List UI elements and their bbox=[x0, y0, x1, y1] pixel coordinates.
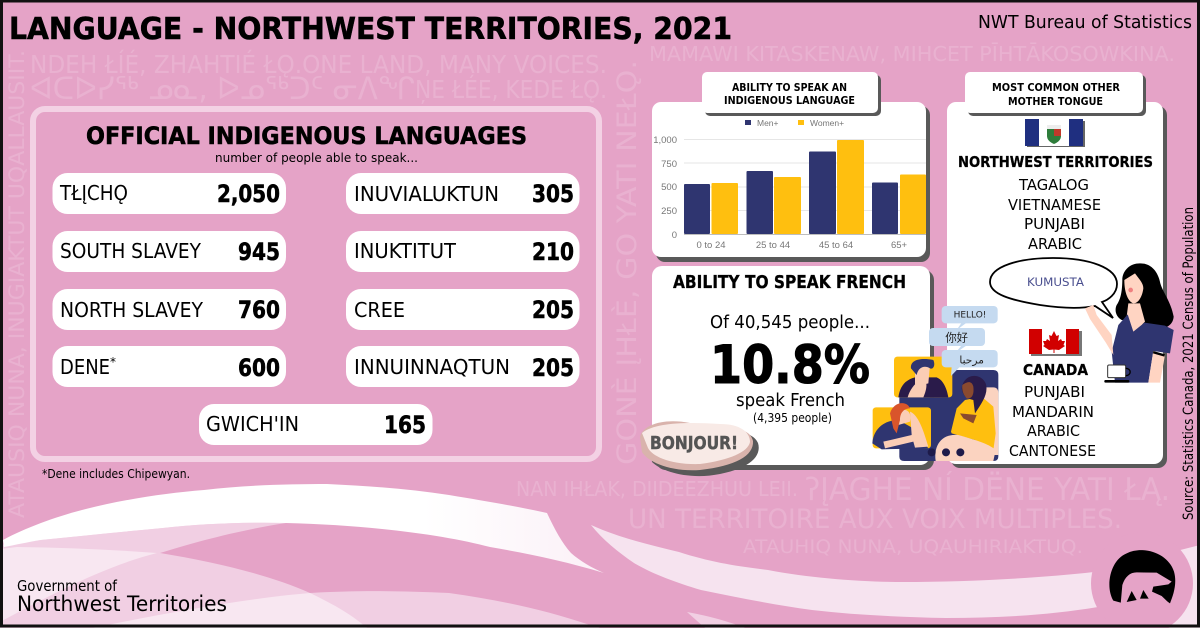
greeting bubbles: 你好 bbox=[945, 329, 968, 345]
panel: French: ABILITY TO SPEAK FRENCH bbox=[673, 272, 906, 293]
background swooshes bbox=[0, 484, 1200, 628]
pill: Inuvialuktun: INUVIALUKTUN bbox=[354, 182, 499, 206]
list: Canada: ARABIC bbox=[1027, 422, 1080, 440]
faded multilingual background text: NAN IHŁAK, DIIDEEZHUU LEII. bbox=[516, 477, 798, 501]
panel: French: speak French bbox=[736, 390, 845, 411]
panel: French: Of 40,545 people... bbox=[710, 312, 870, 333]
pill: Innuinnaqtun: INNUINNAQTUN bbox=[354, 355, 510, 379]
list: Northwest Territories: VIETNAMESE bbox=[1008, 196, 1101, 214]
faded multilingual background text: MAMAWI KITASKENAW, MIHCET PĪHTĀKOSOWKINA. bbox=[649, 42, 1175, 66]
faded multilingual background text: ʔĮAGHE NÍ DËNE YATI ŁĄ. bbox=[805, 472, 1170, 508]
pill: Dene: 600 bbox=[238, 354, 280, 382]
faded multilingual background text: UN TERRITOIRE AUX VOIX MULTIPLES. bbox=[628, 504, 1122, 535]
greeting bubbles: HELLO! bbox=[954, 311, 986, 321]
mother tongue title tab: MOTHER TONGUE bbox=[1008, 96, 1103, 108]
list: Northwest Territories: NORTHWEST TERRITORIES bbox=[958, 153, 1153, 171]
pill: Innuinnaqtun: 205 bbox=[532, 354, 574, 382]
greeting bubbles: مرحبا bbox=[959, 353, 984, 366]
illustration: woman with mug bbox=[1085, 263, 1174, 383]
pill: Inuktitut: INUKTITUT bbox=[354, 239, 457, 263]
bar chart: 0 to 24 bbox=[696, 240, 726, 251]
list: Northwest Territories: TAGALOG bbox=[1018, 176, 1089, 194]
badge: Bonjour bbox=[640, 421, 759, 476]
pill: Innuinnaqtun bbox=[346, 346, 580, 387]
speech bubble: Kumusta: KUMUSTA bbox=[1027, 275, 1084, 289]
list: Canada: MANDARIN bbox=[1012, 403, 1094, 421]
bar chart: 750 bbox=[661, 159, 677, 170]
chart legend bbox=[745, 118, 844, 128]
pill: North Slavey: 760 bbox=[238, 296, 280, 324]
list: Northwest Territories bbox=[958, 153, 1153, 253]
pill: North Slavey bbox=[52, 289, 286, 330]
pill: Tlicho bbox=[52, 173, 286, 214]
bar chart bbox=[653, 135, 926, 251]
pill: South Slavey: SOUTH SLAVEY bbox=[60, 239, 202, 263]
icon: polar bear logo bbox=[1091, 532, 1193, 628]
panel: most common other mother tongue bbox=[947, 102, 1167, 468]
list: Canada: PUNJABI bbox=[1024, 383, 1085, 401]
source note: Source: Statistics Canada, 2021 Census of Population bbox=[1181, 207, 1197, 520]
list: Northwest Territories: PUNJABI bbox=[1024, 215, 1085, 233]
icon: NWT flag bbox=[1025, 119, 1085, 147]
publisher name: NWT Bureau of Statistics bbox=[978, 12, 1192, 33]
pill: Gwich'in bbox=[199, 404, 432, 445]
government logo text bbox=[17, 577, 227, 616]
bar chart: 1,000 bbox=[653, 135, 677, 146]
pill: South Slavey bbox=[52, 231, 286, 272]
pill: Gwich'in: 165 bbox=[384, 411, 426, 439]
government logo text: Northwest Territories bbox=[17, 592, 227, 616]
panel: chart bbox=[652, 102, 930, 262]
pill: Cree: CREE bbox=[354, 298, 405, 322]
badge: Bonjour: BONJOUR! bbox=[650, 433, 738, 454]
pill: Cree bbox=[346, 289, 580, 330]
bar chart: 500 bbox=[661, 182, 677, 193]
pill: Inuvialuktun: 305 bbox=[532, 180, 574, 208]
greeting bubbles bbox=[929, 306, 998, 376]
chart title tab: INDIGENOUS LANGUAGE bbox=[724, 95, 855, 107]
bar chart: 25 to 44 bbox=[756, 240, 790, 251]
pill: Tlicho: 2,050 bbox=[217, 180, 280, 208]
big percentage: 10.8% bbox=[710, 335, 870, 396]
mother tongue title tab: MOST COMMON OTHER bbox=[992, 82, 1120, 94]
pill: Dene: * bbox=[110, 355, 116, 369]
mother tongue title tab bbox=[965, 72, 1146, 116]
footnote: *Dene includes Chipewyan. bbox=[42, 467, 190, 481]
chart legend: Men+ bbox=[757, 118, 779, 128]
pill: Inuktitut bbox=[346, 231, 580, 272]
pill: Gwich'in: GWICH'IN bbox=[206, 412, 299, 436]
pill: North Slavey: NORTH SLAVEY bbox=[60, 298, 204, 322]
faded multilingual background text: ATAUSIQ NUNA, INUGIAKTUT UQALLAUSIIT. bbox=[5, 50, 29, 518]
pill: Dene bbox=[52, 346, 286, 387]
icon: Canadian flag bbox=[1029, 329, 1082, 356]
list: Canada bbox=[1009, 361, 1096, 460]
panel: French: (4,395 people) bbox=[753, 411, 832, 425]
faded multilingual background text: GONÈ ĮHŁÈ, GO YATI NEŁǪ. bbox=[611, 60, 643, 465]
panel heading: OFFICIAL INDIGENOUS LANGUAGES bbox=[86, 122, 527, 150]
list: Canada: CANADA bbox=[1023, 361, 1088, 379]
bar chart: 45 to 64 bbox=[819, 240, 853, 251]
bar chart: 65+ bbox=[891, 240, 908, 251]
bar chart: 0 bbox=[672, 230, 677, 241]
pill: Inuktitut: 210 bbox=[532, 238, 574, 266]
chart legend: Women+ bbox=[810, 118, 844, 128]
pill: Cree: 205 bbox=[532, 296, 574, 324]
panel: French bbox=[652, 266, 934, 470]
chart title tab: ABILITY TO SPEAK AN bbox=[732, 82, 847, 94]
speech bubble: Kumusta bbox=[990, 258, 1117, 318]
list: Northwest Territories: ARABIC bbox=[1028, 235, 1082, 253]
bar chart: 250 bbox=[661, 206, 677, 217]
faded multilingual background text: ᐊᑕᐅᓯᖅ ᓄᓇ, ᐅᓄᖅᑐᑦ ᓂᐱᖏ bbox=[30, 71, 415, 107]
faded multilingual background text: ŅE ŁÉE, KEDE ŁǪ. bbox=[415, 75, 607, 104]
government logo text: Government of bbox=[17, 577, 118, 595]
pill: Dene: DENE bbox=[60, 355, 110, 379]
list: Canada: CANTONESE bbox=[1009, 442, 1096, 460]
title: LANGUAGE - NORTHWEST TERRITORIES, 2021 bbox=[9, 12, 732, 47]
chart title tab bbox=[702, 72, 881, 116]
panel: official indigenous languages bbox=[33, 109, 599, 459]
pill: Inuvialuktun bbox=[346, 173, 580, 214]
faded multilingual background text: NDEH ŁÍÉ, ZHAHTIÉ ŁǪ.ONE LAND, MANY VOICES. bbox=[30, 50, 607, 79]
panel subheading: number of people able to speak... bbox=[215, 150, 418, 165]
faded multilingual background text: ATAUHIQ NUNA, UQAUHIRIAKTUQ. bbox=[743, 536, 1083, 558]
illustration: video call with greetings bbox=[872, 306, 998, 461]
pill: South Slavey: 945 bbox=[238, 238, 280, 266]
pill: Tlicho: TŁĮCHǪ bbox=[59, 181, 128, 205]
